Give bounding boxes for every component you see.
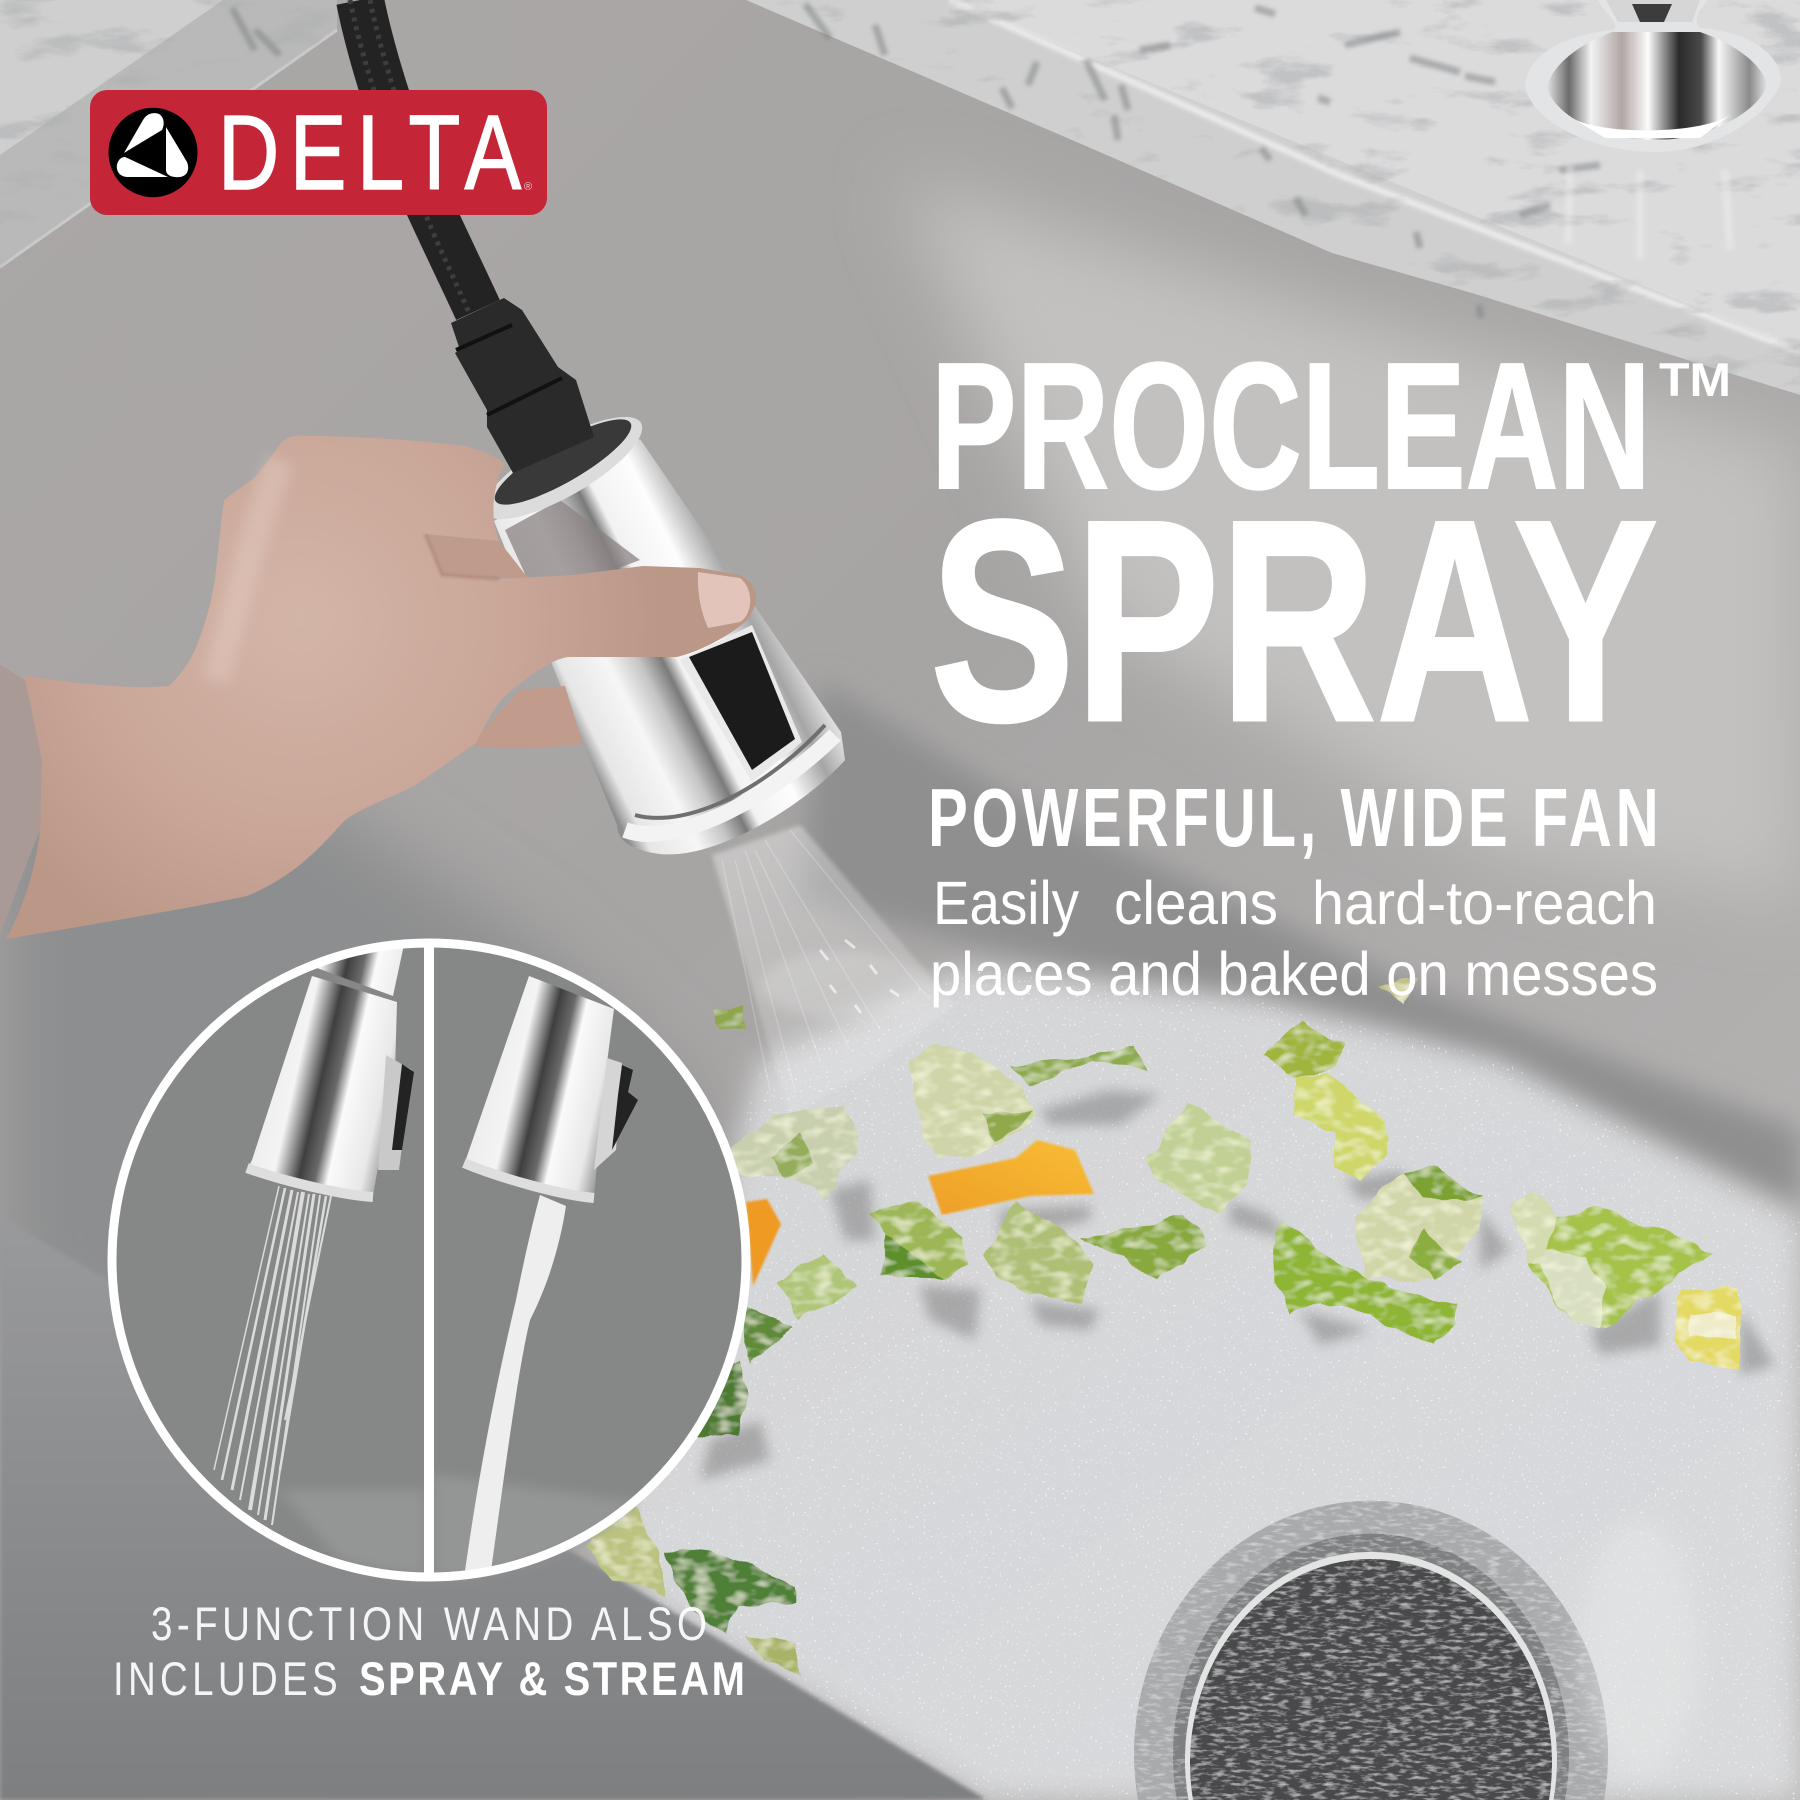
sprayer hose, black braided [350,0,478,315]
logo triangle marks [117,113,188,177]
trademark mark: TM [1659,353,1731,406]
finger crease shadow [425,534,499,579]
spray stream lines [214,1186,331,1525]
wand rim [464,1163,594,1198]
wand rim [247,1168,373,1197]
inset lower surface reflection [280,1475,640,1577]
drain rim shadow [1173,1534,1569,1800]
wand neck [317,948,404,996]
wand body [494,439,845,854]
small green pieces [1262,1022,1343,1078]
chrome faucet base, top right [1525,0,1781,260]
skin sheen [215,460,280,680]
hose nut [451,298,594,473]
wall lighter right glow [900,180,1800,900]
marble counter top left [0,0,337,267]
food shadows [700,1090,1775,1480]
description line 1: hard-to-reach [1312,869,1657,937]
hand [6,435,756,939]
pale lettuce left [729,1104,862,1198]
top rim [471,399,655,537]
orange pepper pieces [746,1140,1094,1286]
inset ring [112,943,746,1577]
inset background [112,943,746,1577]
button [594,1058,622,1170]
sink floor [590,970,1800,1800]
bottom lettuce [584,1494,664,1594]
right half: stream mode [464,976,638,1578]
description line 2: places and baked on messes [930,940,1658,1008]
logo wordmark: DELTA [218,94,521,212]
marble veining [0,0,1800,420]
pale lettuce under spray [908,1045,1038,1160]
food scraps: lettuce and pepper [584,979,1740,1674]
thumb nail [698,572,750,628]
bottom chrome band [625,735,835,834]
wall left shade [0,720,700,1500]
wand body [464,976,614,1198]
wand body [247,976,397,1195]
yellow lettuce right [1673,1287,1740,1369]
button dark [392,1064,414,1150]
lettuce curl [1010,1045,1147,1086]
drain light edge [1185,1552,1557,1800]
caption below inset [113,1598,745,1706]
button dark [612,1065,638,1150]
middle finger behind thumb [425,534,528,578]
solid water stream [464,1195,566,1578]
logo registered mark: ® [524,181,532,193]
button [378,1055,412,1170]
marble counter right [746,0,1800,395]
description line 1: Easily [933,869,1079,937]
caption below inset: 3-FUNCTION WAND ALSO [151,1598,707,1651]
left half: spray mode [214,940,414,1525]
logo: Delta [90,90,547,215]
sink drain [1134,1501,1608,1800]
sleeve [0,665,42,935]
panel: circular inset with two wand modes [112,940,746,1578]
drain dark opening [1190,1559,1552,1800]
subheading: POWERFUL, WIDE FAN [928,773,1659,864]
drain flange [1134,1501,1608,1800]
shadow band on wall [800,680,1800,1210]
logo black circle [108,108,198,197]
hand and wrist [0,435,756,939]
caption below inset: INCLUDES [113,1653,338,1706]
lower finger [470,686,583,748]
lettuce rib [1143,1101,1252,1213]
divider [424,943,434,1577]
rim inner dark [485,406,641,518]
big lettuce right [1512,1190,1712,1326]
marble dark veins [232,4,1600,318]
lettuce pieces centre [869,1201,968,1279]
lettuce cluster right centre [1354,1167,1483,1280]
nut seams [456,325,562,415]
logo red badge [90,90,547,215]
upper reflection [505,500,640,590]
caption below inset: SPRAY & STREAM [359,1654,745,1706]
description line 1: cleans [1114,869,1278,937]
lettuce by circle [777,1254,858,1321]
front wall of sink [0,1217,987,1800]
button frame [680,625,802,782]
spray button [689,632,795,770]
description line 1 [933,869,1657,937]
spray wand head, chrome [451,298,845,854]
water mist by drain [1580,1520,1700,1780]
water spray fan [712,825,955,1115]
water droplets on floor [600,950,1800,1800]
